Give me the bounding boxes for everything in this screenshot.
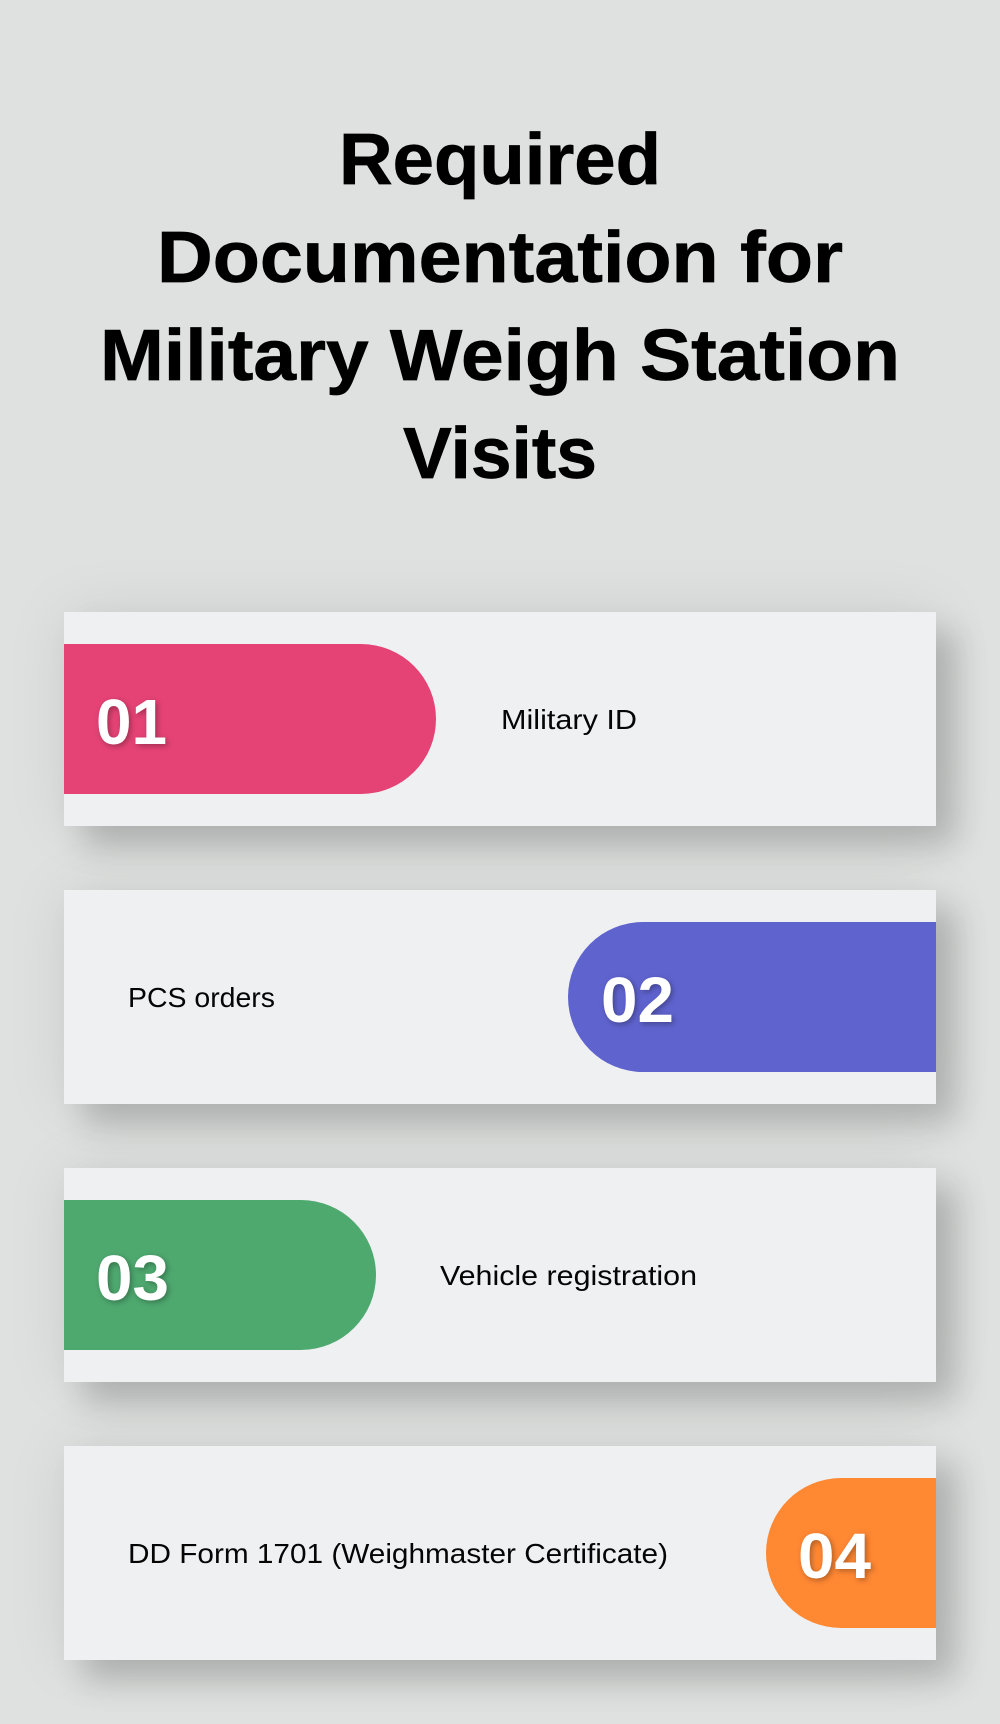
number 01: 01 <box>96 686 167 758</box>
panel: DD Form 1701 <box>64 1446 936 1660</box>
panel: PCS orders <box>64 890 936 1104</box>
title: Visits <box>403 414 597 494</box>
number 02: 02 <box>601 964 674 1036</box>
number 03: 03 <box>96 1242 169 1314</box>
title <box>100 120 900 494</box>
label: DD Form 1701: DD Form 1701 (Weighmaster Certificate) <box>128 1538 668 1569</box>
label: Vehicle registration: Vehicle registration <box>440 1260 697 1291</box>
title: Required <box>339 120 661 200</box>
number 04: 04 <box>798 1520 871 1592</box>
badge 02 <box>568 922 936 1072</box>
badge 04 <box>766 1478 936 1628</box>
title: Military Weigh Station <box>100 316 900 396</box>
label: Military ID: Military ID <box>501 704 637 735</box>
title: Documentation for <box>157 218 843 298</box>
badge 03 <box>64 1200 376 1350</box>
panel: Vehicle registration <box>64 1168 936 1382</box>
panel: Military ID <box>64 612 936 826</box>
label: PCS orders: PCS orders <box>128 982 275 1013</box>
badge 01 <box>64 644 436 794</box>
